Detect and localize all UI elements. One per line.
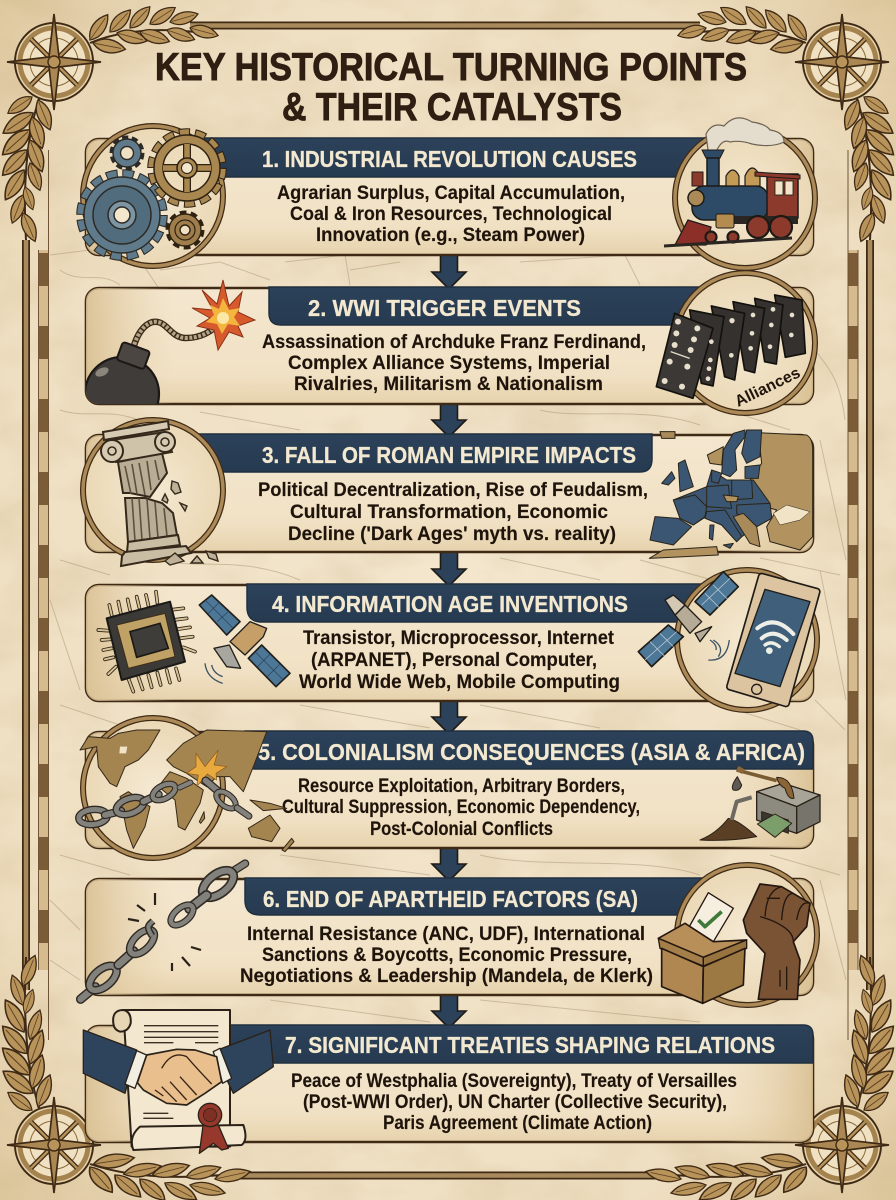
- header: panel 6: 6. END OF APARTHEID FACTORS (SA): [263, 886, 638, 912]
- header: panel 3: [190, 434, 652, 472]
- text: panel 6: [240, 924, 653, 987]
- title: KEY HISTORICAL TURNING POINTS: [155, 46, 747, 89]
- ornament: bottom-left compass and laurel: [0, 953, 252, 1200]
- text: panel 6: Internal Resistance (ANC, UDF), International: [247, 924, 645, 945]
- header: panel 6: [245, 878, 715, 915]
- text: panel 5: Post-Colonial Conflicts: [370, 819, 553, 840]
- text: panel 5: Cultural Suppression, Economic Dependency,: [282, 797, 640, 818]
- icon: resource extraction machine: [700, 768, 820, 840]
- text: panel 3: [258, 480, 648, 545]
- ornament: bottom-right compass and laurel: [644, 953, 896, 1200]
- panel 7: Significant treaties: [83, 1010, 813, 1153]
- icon: treaty scroll and handshake: [83, 1010, 273, 1153]
- icon: map of Europe: [649, 430, 813, 558]
- text: panel 6: Negotiations & Leadership (Mandela, de Klerk): [240, 966, 653, 987]
- panel 2: WWI trigger events: [85, 273, 815, 431]
- text: panel 2: Complex Alliance Systems, Imperial: [288, 353, 610, 374]
- header: panel 1: 1. INDUSTRIAL REVOLUTION CAUSES: [262, 146, 637, 172]
- text: panel 2: [262, 332, 646, 395]
- text: panel 1: Coal & Iron Resources, Technological: [290, 204, 612, 225]
- header: panel 2: 2. WWI TRIGGER EVENTS: [308, 295, 581, 321]
- faint map lines: [50, 245, 846, 1022]
- text: panel 4: World Wide Web, Mobile Computing: [299, 672, 620, 693]
- text: panel 4: (ARPANET), Personal Computer,: [311, 650, 597, 671]
- text: panel 1: [277, 183, 625, 246]
- text: panel 2: Assassination of Archduke Franz Ferdinand,: [262, 332, 646, 353]
- arrow: step 1 to 2: [432, 255, 466, 289]
- text: panel 5: Resource Exploitation, Arbitrary Borders,: [298, 776, 625, 797]
- panel 3: Fall of Roman Empire impacts: [83, 420, 813, 566]
- arrow: step 3 to 4: [432, 552, 466, 586]
- icon: satellite left: [199, 595, 290, 687]
- label: Alliances: Alliances: [732, 364, 803, 411]
- ornament: top-right compass and laurel: [676, 3, 896, 244]
- header: panel 4: [247, 584, 715, 622]
- text: panel 7: [291, 1071, 737, 1134]
- panel 1: Industrial Revolution causes: [81, 118, 815, 268]
- text: panel 7: Paris Agreement (Climate Action): [383, 1113, 652, 1134]
- ornament: top-left compass and laurel: [0, 3, 220, 244]
- text: panel 3: Cultural Transformation, Economic: [290, 502, 608, 523]
- arrow: step 2 to 3: [432, 403, 466, 437]
- header: panel 5: 5. COLONIALISM CONSEQUENCES (ASIA & AFRICA): [258, 739, 805, 765]
- text: panel 5: [282, 776, 640, 840]
- title: & THEIR CATALYSTS: [282, 86, 622, 129]
- icon: satellite and smartphone: [638, 570, 817, 710]
- text: panel 4: Transistor, Microprocessor, Internet: [303, 628, 615, 649]
- title: [155, 46, 747, 129]
- text: panel 1: Agrarian Surplus, Capital Accumulation,: [277, 183, 625, 204]
- icon: falling dominoes: [656, 273, 815, 413]
- icon: ballot box and raised fist: [658, 865, 817, 1005]
- panel 5: Colonialism consequences: [78, 718, 820, 858]
- text: panel 4: [299, 628, 620, 693]
- header: panel 1: [200, 138, 710, 177]
- text: panel 3: Political Decentralization, Rise of Feudalism,: [258, 480, 648, 501]
- header: panel 2: [269, 287, 710, 325]
- header: panel 5: [245, 731, 813, 769]
- panel 6: End of Apartheid factors: [75, 859, 817, 1005]
- panel 4: Information Age inventions: [86, 570, 817, 710]
- header: panel 4: 4. INFORMATION AGE INVENTIONS: [272, 591, 628, 617]
- icon: microprocessor: [98, 592, 195, 692]
- icon: bomb with lit fuse: [86, 280, 256, 404]
- arrow: step 4 to 5: [432, 700, 466, 734]
- icon: chained world map: [78, 718, 294, 858]
- text: panel 2: Rivalries, Militarism & Nationalism: [294, 374, 603, 395]
- icon: broken chain: [75, 859, 250, 1005]
- text: panel 1: Innovation (e.g., Steam Power): [316, 225, 585, 246]
- icon: steam locomotive: [664, 118, 815, 268]
- icon: gears: [81, 126, 223, 266]
- text: panel 7: Peace of Westphalia (Sovereignty), Treaty of Versailles: [291, 1071, 737, 1092]
- header: panel 3: 3. FALL OF ROMAN EMPIRE IMPACTS: [262, 442, 636, 468]
- icon: broken Roman column: [83, 420, 223, 566]
- text: panel 6: Sanctions & Boycotts, Economic Pressure,: [262, 945, 632, 966]
- arrow: step 5 to 6: [432, 847, 466, 881]
- header: panel 7: 7. SIGNIFICANT TREATIES SHAPING RELATIONS: [285, 1032, 775, 1058]
- text: panel 7: (Post-WWI Order), UN Charter (Collective Security),: [303, 1092, 727, 1113]
- arrow: step 6 to 7: [432, 994, 466, 1028]
- text: panel 3: Decline ('Dark Ages' myth vs. reality): [288, 524, 616, 545]
- header: panel 7: [225, 1025, 813, 1063]
